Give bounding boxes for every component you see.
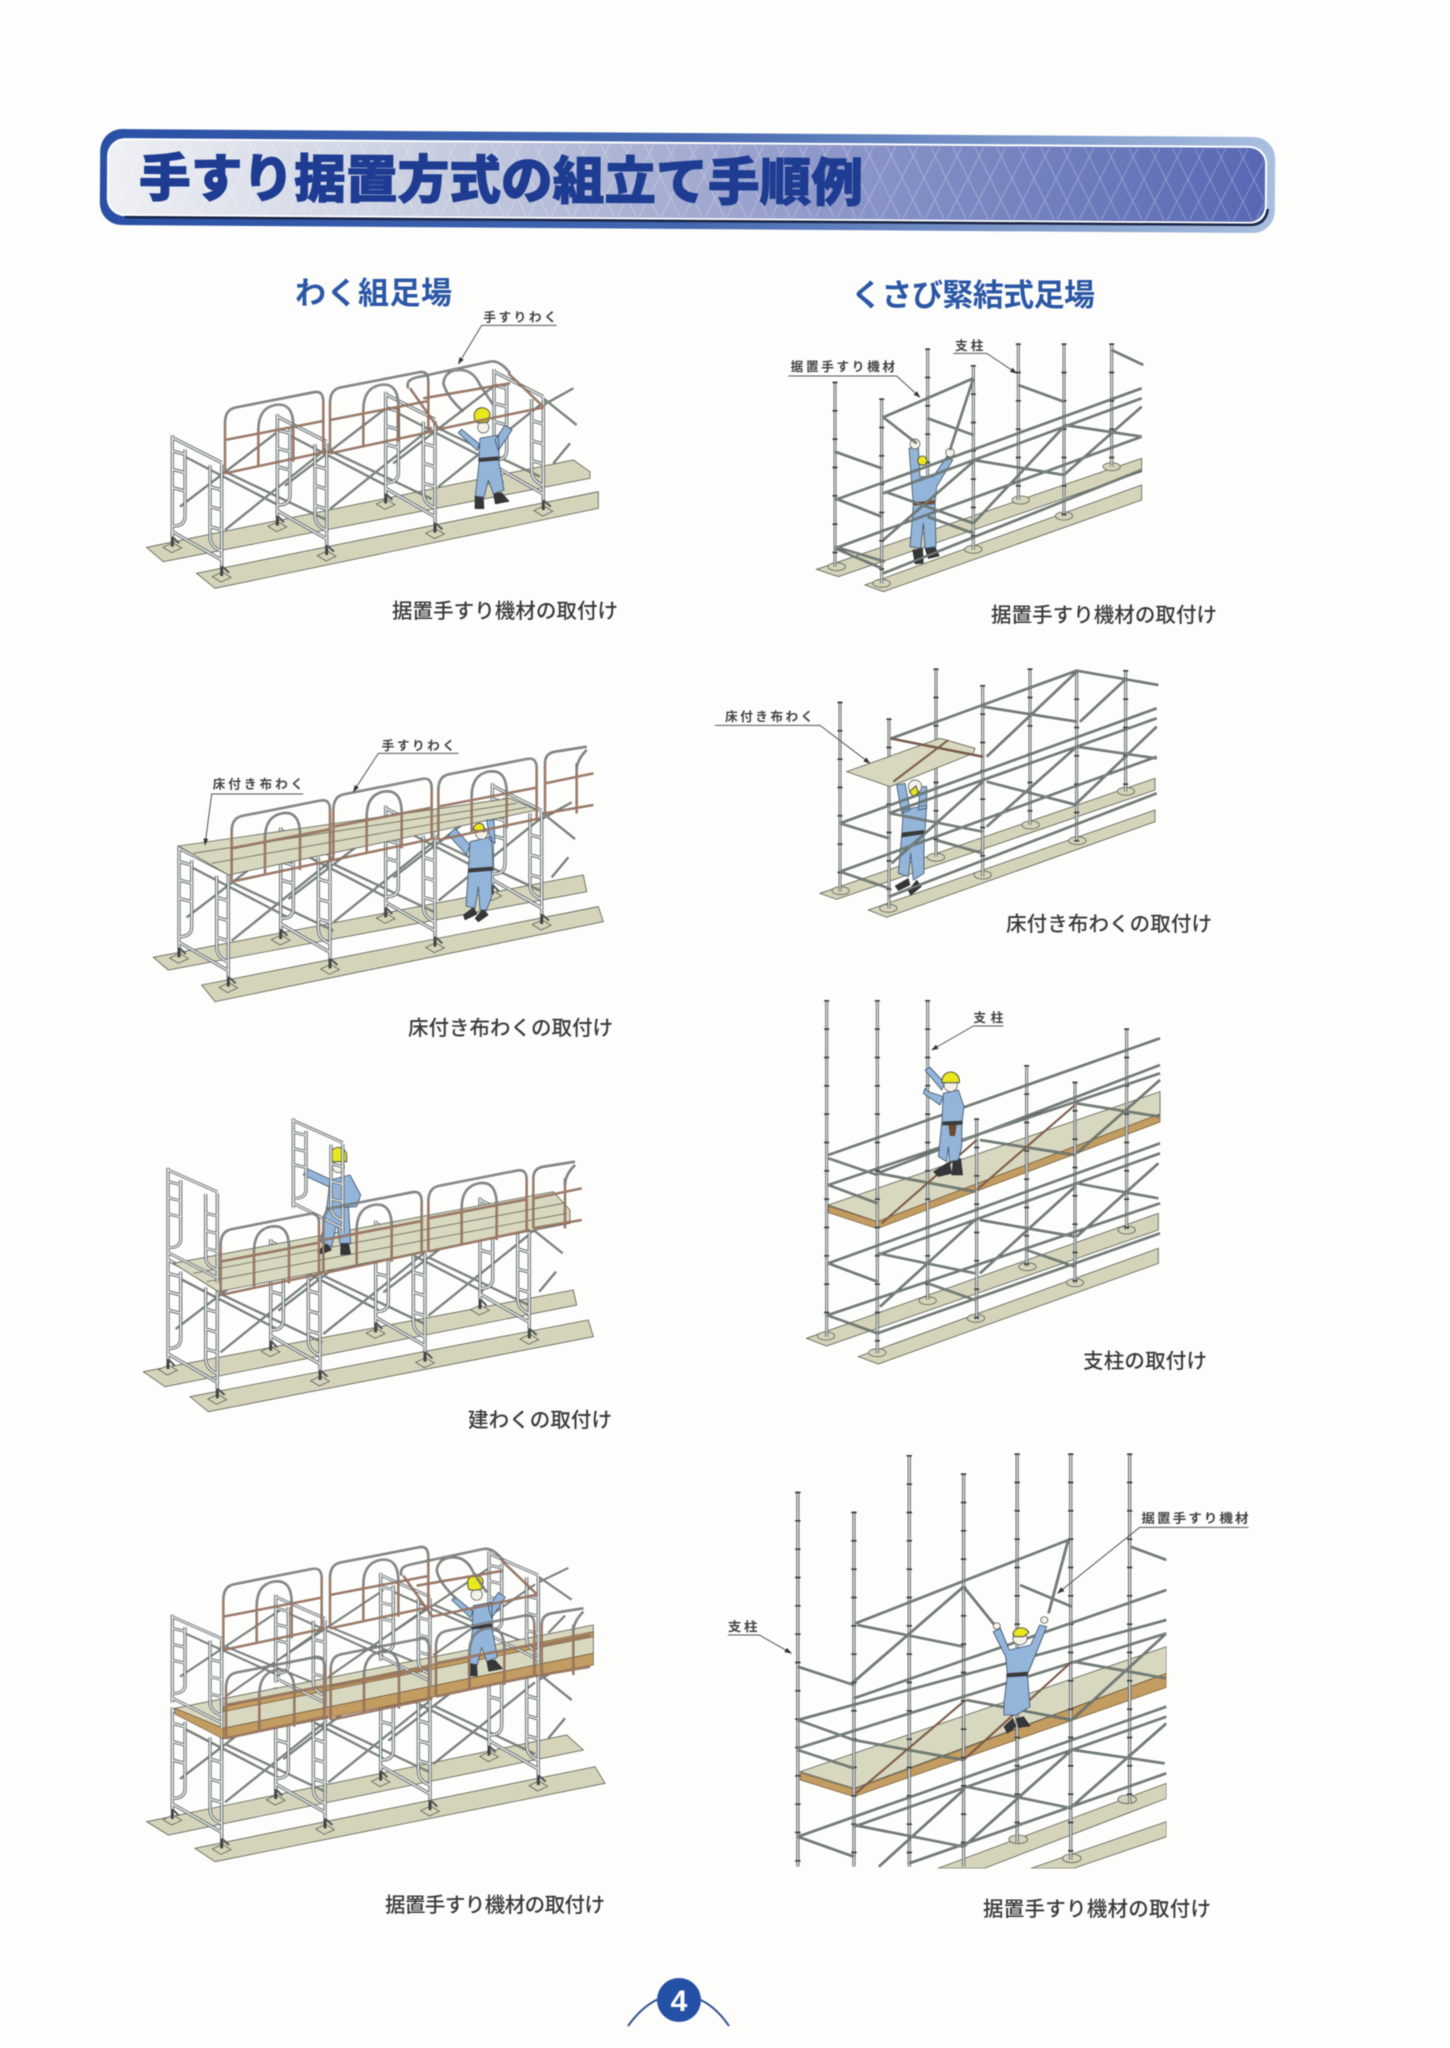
ledgers and braces (798, 1540, 1166, 1867)
caption: 床付き布わくの取付け (408, 1017, 613, 1040)
standards (835, 343, 1112, 583)
sill plates (147, 1735, 605, 1862)
label: floored ledger frame: 床付き布わく (725, 709, 813, 724)
panel: frame scaffold step 3 (143, 1118, 593, 1412)
deck (178, 798, 537, 875)
handrail frames (232, 747, 593, 882)
sill plates (807, 1213, 1158, 1364)
base plates (832, 787, 1135, 912)
label: handrail member: 据置手すり機材 (791, 359, 895, 374)
sill plates (820, 778, 1155, 917)
label: handrail frame: 手すりわく (382, 738, 455, 753)
sill plates (147, 460, 598, 588)
frames (163, 369, 553, 582)
label: floored ledger frame: 床付き布わく (213, 776, 303, 791)
handrail frames (225, 361, 543, 473)
label: floored ledger frame (205, 776, 303, 845)
label: standard: 支柱 (955, 338, 984, 353)
upper handrail frames (223, 1547, 537, 1650)
ledgers and braces (840, 671, 1158, 897)
braces (180, 387, 577, 530)
worker (452, 1575, 505, 1676)
caption: 据置手すり機材の取付け (385, 1894, 605, 1917)
floored ledger frame (847, 738, 975, 787)
label: standard: 支柱 (728, 1618, 757, 1634)
lower handrail frames (226, 1608, 590, 1738)
worker (303, 1147, 361, 1255)
title banner (100, 129, 1275, 233)
deck (175, 1625, 593, 1739)
caption: 支柱の取付け (1083, 1350, 1207, 1373)
sill plates (817, 458, 1142, 592)
deck (173, 1192, 570, 1292)
worker (895, 780, 927, 895)
handrail frames (221, 1162, 582, 1295)
lifted frame (293, 1118, 343, 1234)
panel: wedge scaffold step 4 (728, 1453, 1249, 1868)
base plates (1009, 1795, 1136, 1863)
sill plates (938, 1783, 1166, 1868)
deck (800, 1647, 1166, 1797)
sill plates (153, 875, 603, 1002)
heading: left column: わく組足場 (295, 276, 452, 311)
caption: 据置手すり機材の取付け (392, 600, 618, 623)
worker (448, 820, 495, 922)
panel: frame scaffold step 1 (147, 310, 598, 588)
ledgers and braces (827, 1038, 1160, 1333)
base plates (828, 463, 1120, 587)
panel: frame scaffold step 2 (153, 738, 603, 1002)
sill plates (143, 1290, 593, 1412)
caption: 建わくの取付け (468, 1409, 612, 1432)
deck (828, 1092, 1160, 1229)
standards (827, 1000, 1127, 1353)
label: standard (953, 338, 1017, 373)
label: standard: 支柱 (973, 1010, 1004, 1025)
label: standard (932, 1010, 1004, 1050)
label: handrail member (788, 359, 920, 397)
standards (840, 668, 1126, 908)
upper frames (172, 1551, 538, 1728)
label: handrail member: 据置手すり機材 (1141, 1510, 1249, 1525)
caption: 床付き布わくの取付け (1006, 913, 1212, 936)
caption: 据置手すり機材の取付け (983, 1898, 1211, 1921)
page number: 4 (671, 1985, 688, 2018)
worker (993, 1617, 1048, 1733)
label: handrail frame (458, 310, 557, 364)
label: floored ledger frame (715, 709, 870, 763)
title text: 手すり据置方式の組立て手順例 (139, 150, 863, 213)
ledgers and braces (835, 350, 1143, 573)
standards (798, 1453, 1130, 1867)
label: standard (728, 1618, 791, 1653)
braces (187, 801, 575, 941)
caption: 据置手すり機材の取付け (991, 604, 1217, 627)
base plates (817, 1226, 1135, 1357)
panel: frame scaffold step 4 (147, 1547, 605, 1862)
upper braces (180, 1568, 572, 1697)
page number (628, 1978, 729, 2026)
upper end frame (168, 1168, 217, 1283)
frames (170, 783, 551, 993)
worker (909, 439, 954, 564)
label: handrail member (1057, 1510, 1249, 1593)
panel: wedge scaffold step 2 (715, 668, 1158, 917)
lower frames (163, 1644, 548, 1854)
panel: wedge scaffold step 1 (788, 338, 1143, 592)
worker (458, 408, 512, 509)
worker (923, 1067, 964, 1177)
frames (159, 1197, 539, 1404)
label: handrail frame (353, 738, 458, 792)
lower braces (180, 1663, 572, 1802)
heading: right column: くさび緊結式足場 (851, 278, 1095, 313)
braces (176, 1216, 563, 1352)
panel: wedge scaffold step 3 (807, 1000, 1160, 1364)
label: handrail frame: 手すりわく (483, 310, 557, 325)
